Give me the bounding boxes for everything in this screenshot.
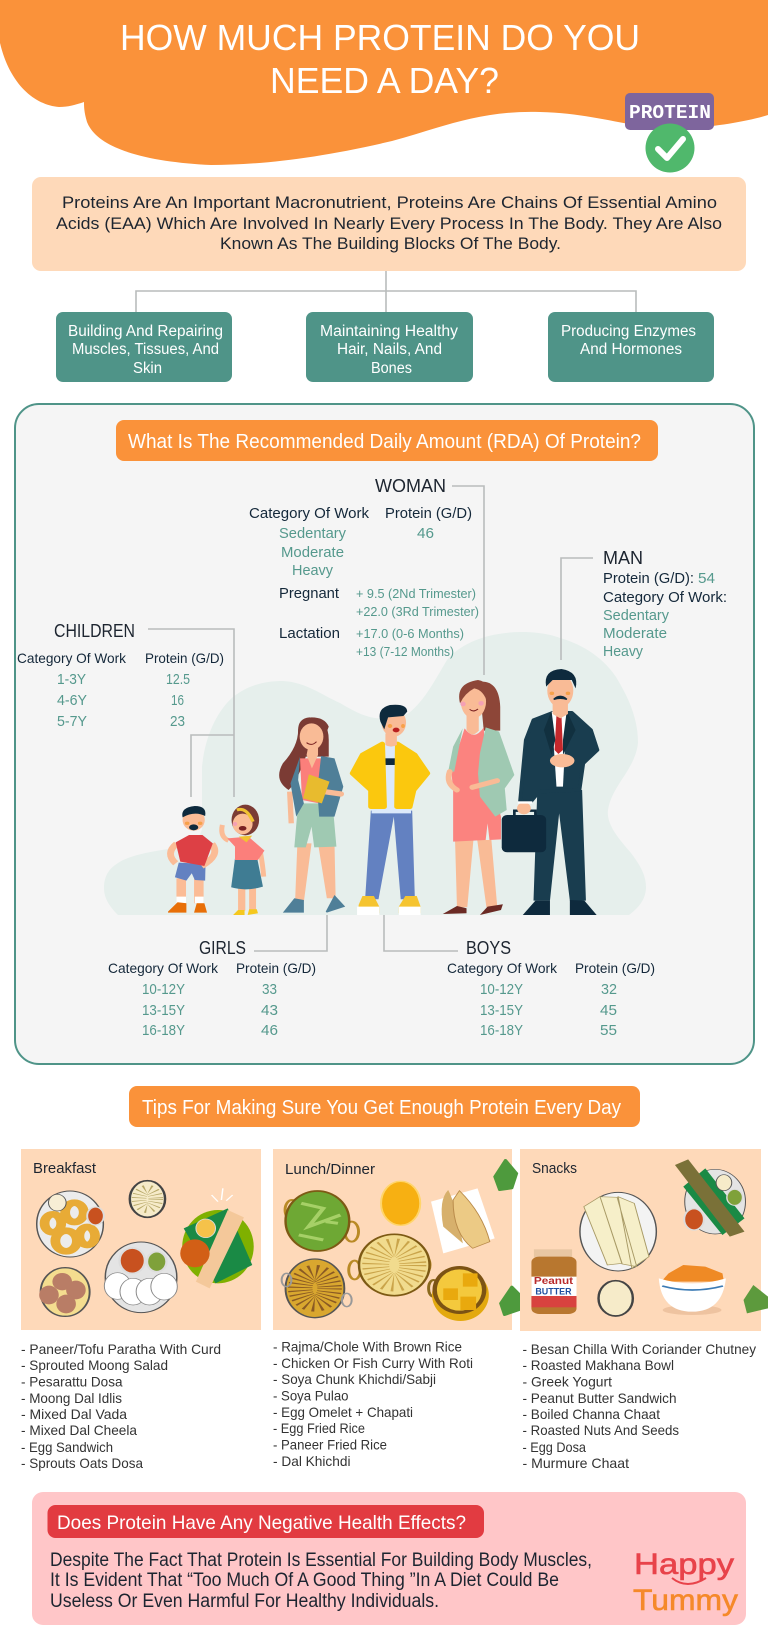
panel: building and repairing: Skin [133, 360, 162, 377]
title: HOW MUCH PROTEIN DO YOU [120, 17, 640, 58]
panel: intro text [32, 177, 746, 271]
logo: happy tummy: Happy [634, 1548, 734, 1581]
block: woman: WOMAN [375, 476, 446, 496]
block: man: Heavy [603, 643, 643, 660]
figure: girl child [222, 805, 264, 915]
text: negative effects body [50, 1550, 592, 1612]
list: snacks: - Roasted Nuts And Seeds [522, 1422, 679, 1438]
list: snacks: - Peanut Butter Sandwich [522, 1390, 676, 1406]
block: man: 54 [698, 570, 715, 587]
list: breakfast: - Mixed Dal Cheela [21, 1422, 137, 1438]
illustration: lunch foods [282, 1160, 525, 1321]
block: children: Protein (G/D) [145, 650, 224, 666]
illustration: breakfast foods [37, 1181, 254, 1316]
title [120, 17, 640, 101]
block: woman: Pregnant [279, 586, 339, 602]
panel: snacks [520, 1149, 768, 1331]
list: snacks: - Greek Yogurt [522, 1374, 612, 1390]
block: boys: 13-15Y [480, 1002, 523, 1019]
block: girls: 46 [261, 1022, 278, 1039]
panel: maintaining healthy: Bones [371, 360, 412, 377]
block: children: Category Of Work [17, 650, 127, 666]
list: breakfast: - Egg Sandwich [21, 1439, 113, 1455]
panel: intro text: Proteins Are An Important Macronutrient, Proteins Are Chains Of Essential Amino [62, 193, 717, 212]
block: children: 5-7Y [57, 713, 87, 730]
list: lunch and dinner: - Egg Fried Rice [273, 1420, 365, 1436]
list: breakfast: - Sprouts Oats Dosa [21, 1455, 143, 1471]
text: negative effects body: Despite The Fact That Protein Is Essential For Building Body Muscles, [50, 1550, 592, 1571]
illustration: snack foods: BUTTER [535, 1287, 572, 1297]
panel: breakfast: Breakfast [33, 1160, 97, 1177]
figure: boy child [168, 806, 215, 913]
list: breakfast [21, 1341, 221, 1471]
list: snacks: - Murmure Chaat [522, 1455, 629, 1471]
list: snacks: - Roasted Makhana Bowl [522, 1357, 674, 1373]
block: girls: 16-18Y [142, 1022, 185, 1039]
logo: happy tummy: Tummy [633, 1584, 738, 1617]
figure: man with briefcase [502, 669, 597, 915]
block: woman: Protein (G/D) [385, 506, 472, 522]
block: girls [108, 938, 316, 1039]
panel: recommended daily amount [15, 404, 754, 1064]
panel: lunch and dinner [273, 1149, 525, 1330]
list: lunch and dinner: - Dal Khichdi [273, 1453, 350, 1469]
header banner blob [0, 0, 768, 165]
figure: woman [443, 680, 514, 915]
block: woman: Heavy [292, 562, 333, 579]
block: man: Moderate [603, 625, 667, 642]
figure: teen girl [279, 717, 345, 913]
block: children: 4-6Y [57, 692, 87, 709]
icon: protein tag with check: PROTEIN [629, 102, 711, 124]
block: children: 23 [170, 713, 185, 730]
list: snacks: - Boiled Channa Chaat [522, 1406, 660, 1422]
block: girls: 43 [261, 1002, 278, 1019]
block: children: 12.5 [166, 671, 190, 688]
block: woman: Lactation [279, 626, 340, 642]
block: children: 1-3Y [57, 671, 86, 688]
block: children: 16 [171, 692, 184, 709]
block: boys: Protein (G/D) [575, 960, 655, 976]
text: negative effects body: It Is Evident That “Too Much Of A Good Thing ”In A Diet Could Be [50, 1570, 559, 1591]
list: lunch and dinner: - Soya Chunk Khichdi/Sabji [273, 1371, 436, 1387]
panel: maintaining healthy [306, 312, 473, 382]
text: negative effects body: Useless Or Even Harmful For Healthy Individuals. [50, 1591, 439, 1612]
block: boys: 45 [600, 1002, 617, 1019]
panel: producing enzymes: And Hormones [580, 341, 682, 358]
list: breakfast: - Mixed Dal Vada [21, 1406, 127, 1422]
heading: tips: Tips For Making Sure You Get Enough Protein Every Day [142, 1097, 621, 1119]
heading: RDA [116, 420, 658, 461]
list: lunch and dinner: - Soya Pulao [273, 1388, 349, 1404]
list: lunch and dinner: - Chicken Or Fish Curry With Roti [273, 1355, 473, 1371]
block: man [603, 548, 727, 660]
background blob behind family [104, 632, 646, 915]
block: boys: 16-18Y [480, 1022, 523, 1039]
list: lunch and dinner: - Egg Omelet + Chapati [273, 1404, 413, 1420]
heading: tips [129, 1086, 640, 1127]
panel: building and repairing [56, 312, 232, 382]
panel: intro text: Acids (EAA) Which Are Involved In Nearly Every Process In The Body. They Are Also [56, 214, 722, 233]
list: lunch and dinner [273, 1339, 473, 1469]
family illustration [168, 669, 597, 915]
block: woman [249, 476, 479, 659]
list: lunch and dinner: - Rajma/Chole With Brown Rice [273, 1339, 462, 1355]
panel: maintaining healthy: Maintaining Healthy [320, 323, 458, 340]
block: boys: BOYS [466, 938, 511, 958]
block: woman: Category Of Work [249, 506, 370, 522]
logo: happy tummy [633, 1548, 738, 1617]
panel: producing enzymes: Producing Enzymes [561, 323, 696, 340]
illustration: snack foods [531, 1159, 768, 1316]
block: woman: 46 [417, 525, 434, 542]
block: woman: +22.0 (3Rd Trimester) [356, 605, 479, 619]
list: breakfast: - Moong Dal Idlis [21, 1390, 122, 1406]
icon: protein tag with check [625, 93, 714, 172]
panel: building and repairing: Muscles, Tissues, And [72, 341, 219, 358]
block: woman: Moderate [281, 544, 344, 561]
panel: maintaining healthy: Hair, Nails, And [337, 341, 442, 358]
block: man: Protein (G/D): [603, 571, 694, 587]
block: girls: 13-15Y [142, 1002, 185, 1019]
block: boys: 55 [600, 1022, 617, 1039]
list: snacks [522, 1341, 756, 1471]
title: NEED A DAY? [270, 60, 499, 101]
block: man: Category Of Work: [603, 590, 727, 606]
block: woman: Sedentary [279, 525, 346, 542]
panel: snacks: Snacks [532, 1160, 577, 1177]
list: snacks: - Egg Dosa [522, 1439, 586, 1455]
heading: negative effects [48, 1505, 484, 1538]
block: girls: 10-12Y [142, 981, 185, 998]
panel: producing enzymes [548, 312, 714, 382]
list: breakfast: - Pesarattu Dosa [21, 1374, 123, 1390]
block: boys: Category Of Work [447, 960, 558, 976]
list: lunch and dinner: - Paneer Fried Rice [273, 1437, 387, 1453]
block: girls: GIRLS [199, 938, 246, 958]
block: man: Sedentary [603, 607, 669, 624]
block: girls: Protein (G/D) [236, 960, 316, 976]
block: boys [447, 938, 655, 1039]
panel: building and repairing: Building And Repairing [68, 323, 223, 340]
list: breakfast: - Sprouted Moong Salad [21, 1357, 168, 1373]
illustration: snack foods: Peanut [534, 1275, 574, 1286]
block: woman: +17.0 (0-6 Months) [356, 627, 464, 641]
block: man: MAN [603, 548, 643, 568]
block: girls: Category Of Work [108, 960, 219, 976]
connector lines [148, 486, 593, 951]
heading: RDA: What Is The Recommended Daily Amount (RDA) Of Protein? [128, 431, 641, 453]
block: boys: 10-12Y [480, 981, 523, 998]
heading: negative effects: Does Protein Have Any Negative Health Effects? [57, 1512, 466, 1534]
panel: intro text: Known As The Building Blocks Of The Body. [220, 234, 561, 253]
figure: teen boy [352, 705, 427, 915]
block: woman: + 9.5 (2Nd Trimester) [356, 587, 476, 601]
list: snacks: - Besan Chilla With Coriander Chutney [522, 1341, 756, 1357]
list: breakfast: - Paneer/Tofu Paratha With Curd [21, 1341, 221, 1357]
panel: negative health effects [32, 1492, 746, 1625]
block: woman: +13 (7-12 Months) [356, 645, 454, 659]
panel: lunch and dinner: Lunch/Dinner [285, 1161, 375, 1178]
block: girls: 33 [262, 981, 277, 998]
block: boys: 32 [601, 981, 617, 998]
block: children: CHILDREN [54, 621, 135, 641]
block: children [17, 621, 224, 730]
panel: breakfast [21, 1149, 261, 1330]
